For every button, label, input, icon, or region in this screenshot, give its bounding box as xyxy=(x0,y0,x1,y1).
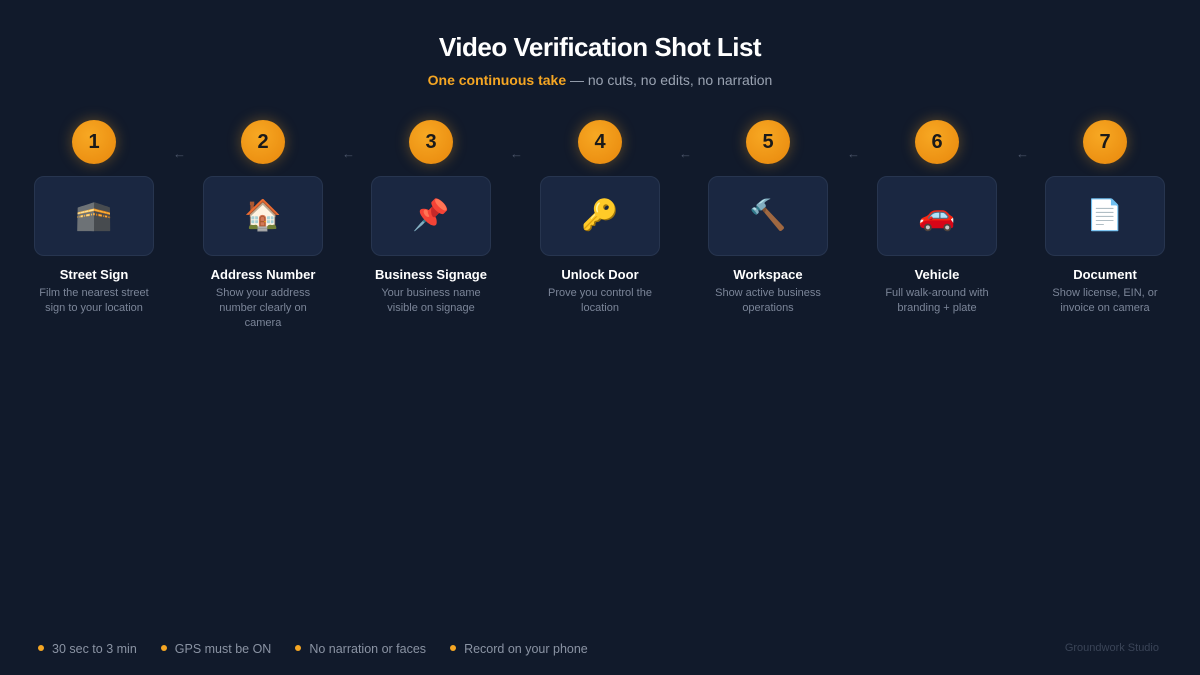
step 4: 🔑 xyxy=(581,199,619,232)
step 6: 🚗 xyxy=(918,199,956,232)
step 3: Your business name visible on signage xyxy=(381,287,481,314)
arrow 2: ← xyxy=(342,146,355,161)
step 2: Address Number xyxy=(211,267,315,282)
step 1: Street Sign xyxy=(60,267,128,282)
step 1: 1 xyxy=(88,131,100,153)
step 5: 5 xyxy=(762,131,774,153)
step 7: 7 xyxy=(1099,131,1111,153)
step 6 xyxy=(877,112,997,314)
footer notes xyxy=(38,642,588,656)
step 4: 4 xyxy=(594,131,606,153)
step 7: 📄 xyxy=(1086,199,1124,232)
footer notes: No narration or faces xyxy=(309,642,426,656)
step 4: Prove you control the location xyxy=(548,287,652,314)
step 1: 🕋 xyxy=(75,199,113,232)
step 6: 6 xyxy=(931,131,943,153)
footer notes: Record on your phone xyxy=(464,642,588,656)
step 7 xyxy=(1045,112,1165,314)
footer notes: GPS must be ON xyxy=(175,642,271,656)
step 7: Show license, EIN, or invoice on camera xyxy=(1052,287,1158,314)
arrow 5: ← xyxy=(847,146,860,161)
step 5 xyxy=(708,112,828,314)
title: Video Verification Shot List xyxy=(439,32,761,62)
step 6: Full walk-around with branding + plate xyxy=(885,287,989,314)
step 5: Show active business operations xyxy=(715,287,821,314)
brand: Groundwork Studio xyxy=(1065,642,1159,654)
step 2: Show your address number clearly on camera xyxy=(216,287,310,329)
step 7: Document xyxy=(1073,267,1137,282)
arrow 1: ← xyxy=(173,146,186,161)
step 4 xyxy=(540,112,660,314)
step 3 xyxy=(371,112,491,314)
subtitle: One continuous take — no cuts, no edits, no narration xyxy=(428,72,772,88)
step 4: Unlock Door xyxy=(561,267,639,282)
step 1: Film the nearest street sign to your location xyxy=(39,287,149,314)
step 6: Vehicle xyxy=(915,267,959,282)
step 3: 📌 xyxy=(412,199,450,232)
step 3: Business Signage xyxy=(375,267,487,282)
step 3: 3 xyxy=(425,131,437,153)
step 2 xyxy=(203,112,323,329)
step 1 xyxy=(34,112,154,314)
step 5: 🔨 xyxy=(749,199,787,232)
arrow 4: ← xyxy=(679,146,692,161)
step 2: 🏠 xyxy=(244,199,282,232)
step 2: 2 xyxy=(257,131,269,153)
step 5: Workspace xyxy=(733,267,803,282)
arrow 6: ← xyxy=(1016,146,1029,161)
footer notes: 30 sec to 3 min xyxy=(52,642,137,656)
arrow 3: ← xyxy=(510,146,523,161)
